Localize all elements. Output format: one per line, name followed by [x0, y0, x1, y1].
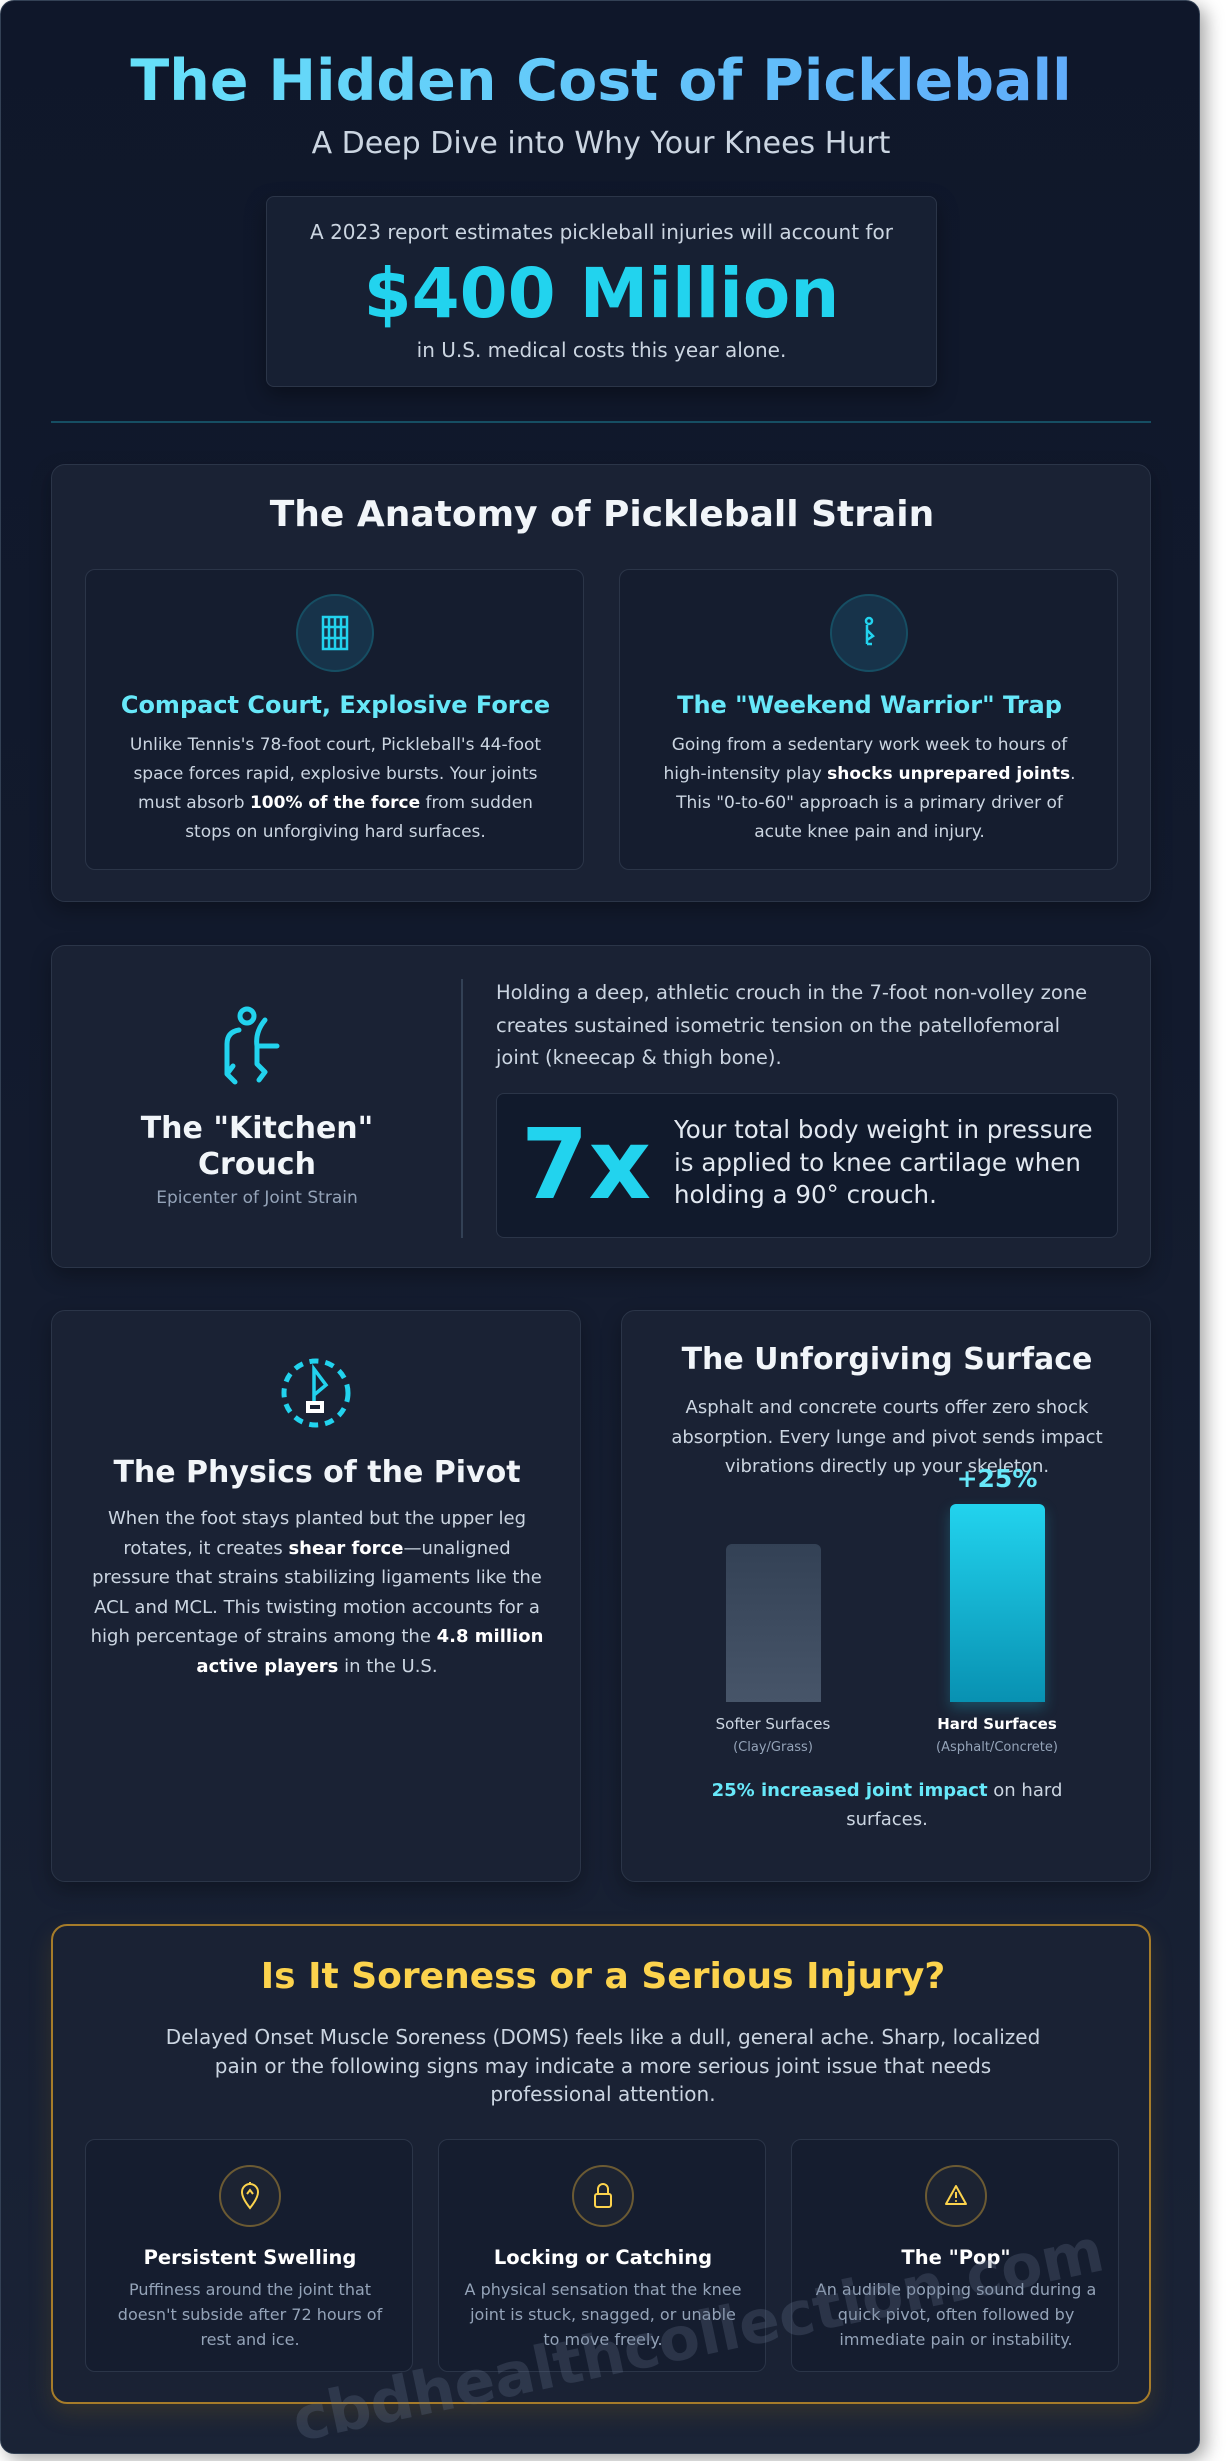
watermark: cbdhealthcollection.com	[286, 2216, 1110, 2454]
callout: 7x: Your total body weight in pressure is applied to knee cartilage when holding a 90° crouch.	[674, 1115, 1093, 1209]
heading: The Physics of the Pivot	[113, 1455, 521, 1490]
subheading: Epicenter of Joint Strain	[156, 1188, 358, 1208]
stat box: in U.S. medical costs this year alone.	[417, 338, 786, 362]
label: softer: Softer Surfaces	[716, 1715, 830, 1733]
card body: Unlike Tennis's 78-foot court, Pickleball's 44-foot space forces rapid, explosive bursts. Your joints must absorb 100% of the force from sudden stops on unforgiving hard surfaces.	[130, 735, 541, 842]
sign text: Puffiness around the joint that doesn't subside after 72 hours of rest and ice.	[118, 2280, 382, 2349]
card heading: The "Weekend Warrior" Trap	[677, 691, 1062, 719]
callout: 7x: 7x	[521, 1108, 651, 1221]
panel: surface	[621, 1310, 1151, 1882]
icon: crouch	[224, 1006, 280, 1084]
label: softer	[716, 1715, 830, 1755]
icon: pivot	[282, 1358, 350, 1428]
bar: softer	[726, 1544, 821, 1702]
label: hard: (Asphalt/Concrete)	[936, 1740, 1058, 1755]
sign heading: The "Pop"	[901, 2246, 1011, 2269]
stat box	[266, 196, 937, 387]
chart caption: 25% increased joint impact on hard surfaces.	[712, 1780, 1062, 1830]
sign text: An audible popping sound during a quick pivot, often followed by immediate pain or instability.	[816, 2280, 1096, 2349]
intro text: Delayed Onset Muscle Soreness (DOMS) feels like a dull, general ache. Sharp, localized pain or the following signs may indicate a more serious joint issue that needs professional attention.	[166, 2025, 1040, 2106]
panel: warning signs	[51, 1924, 1151, 2404]
heading: The Anatomy of Pickleball Strain	[270, 494, 934, 535]
sign heading: Locking or Catching	[494, 2246, 712, 2269]
heading: The Unforgiving Surface	[682, 1342, 1092, 1377]
card body: Going from a sedentary work week to hours of high-intensity play shocks unprepared joints. This "0-to-60" approach is a primary driver of acute knee pain and injury.	[663, 735, 1076, 842]
panel: pivot	[51, 1310, 581, 1882]
sign text: A physical sensation that the knee joint is stuck, snagged, or unable to move freely.	[465, 2280, 741, 2349]
label: hard: Hard Surfaces	[937, 1715, 1057, 1733]
icon: swelling pin	[219, 2165, 281, 2227]
heading: Is It Soreness or a Serious Injury?	[261, 1956, 945, 1997]
bar: hard	[950, 1504, 1045, 1702]
title: The Hidden Cost of Pickleball	[130, 48, 1072, 114]
icon: warning	[925, 2165, 987, 2227]
bar label +25%: +25%	[957, 1464, 1037, 1493]
callout: 7x	[496, 1093, 1118, 1238]
label: softer: (Clay/Grass)	[733, 1740, 813, 1755]
heading	[140, 1111, 373, 1182]
icon: court	[296, 594, 374, 672]
stat box: A 2023 report estimates pickleball injuries will account for	[310, 220, 893, 244]
label: hard	[936, 1715, 1058, 1755]
body: When the foot stays planted but the upper leg rotates, it creates shear force—unaligned pressure that strains stabilizing ligaments like the ACL and MCL. This twisting motion accounts for a high percentage of strains among the 4.8 million active players in the U.S.	[91, 1508, 543, 1676]
sign card: swelling	[85, 2139, 413, 2372]
subtitle: A Deep Dive into Why Your Knees Hurt	[312, 126, 890, 161]
icon: lock	[572, 2165, 634, 2227]
sign card: locking	[438, 2139, 766, 2372]
bar chart	[716, 1464, 1058, 1755]
icon: figure	[830, 594, 908, 672]
body text: Holding a deep, athletic crouch in the 7-foot non-volley zone creates sustained isometric tension on the patellofemoral joint (kneecap & thigh bone).	[496, 981, 1087, 1069]
sign card: pop	[791, 2139, 1119, 2372]
title	[1, 43, 1201, 119]
sub card: compact court	[85, 569, 584, 870]
heading: Crouch	[198, 1147, 316, 1182]
panel: kitchen crouch	[51, 945, 1151, 1268]
sign heading: Persistent Swelling	[144, 2246, 356, 2269]
body: Asphalt and concrete courts offer zero shock absorption. Every lunge and pivot sends impact vibrations directly up your skeleton.	[671, 1397, 1103, 1477]
heading: The "Kitchen"	[141, 1111, 373, 1146]
big stat: $400 Million	[364, 254, 839, 334]
panel: anatomy	[51, 464, 1151, 902]
card heading: Compact Court, Explosive Force	[121, 691, 550, 719]
sub card: weekend warrior	[619, 569, 1118, 870]
